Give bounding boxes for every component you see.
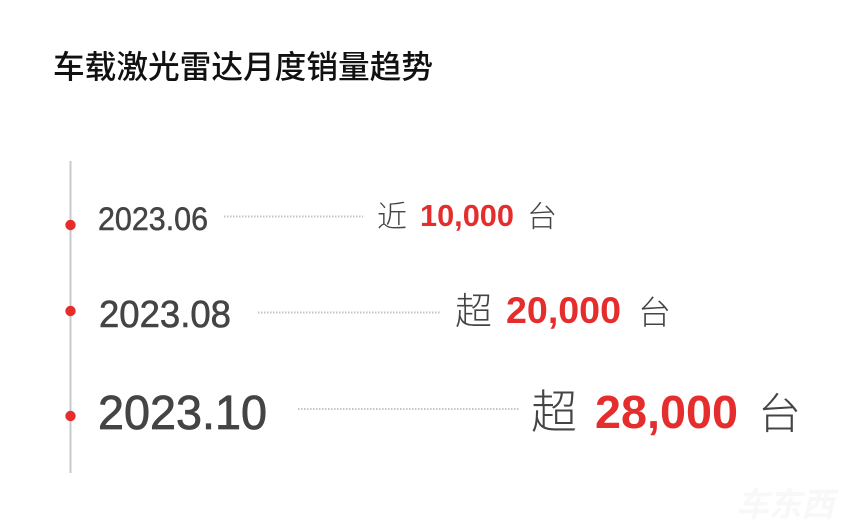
dotted connector: 2023.08 bbox=[258, 312, 440, 314]
value: near 10,000 units: 10,000 bbox=[420, 198, 514, 233]
dotted connector: 2023.06 bbox=[224, 216, 363, 218]
value: over 28,000 units: 28,000 bbox=[595, 386, 738, 438]
title: 车载激光雷达月度销量趋势 bbox=[53, 49, 433, 85]
row: 2023.10 bbox=[65, 386, 801, 440]
date: 2023.08: 2023.08 bbox=[99, 294, 231, 336]
dotted connector: 2023.10 bbox=[298, 408, 520, 410]
value: near 10,000 units bbox=[377, 198, 557, 234]
value: over 28,000 units: 台 bbox=[758, 391, 801, 439]
row: 2023.08 bbox=[65, 290, 671, 336]
value: near 10,000 units: 近 bbox=[377, 201, 407, 234]
value: over 20,000 units bbox=[455, 290, 671, 332]
timeline axis bbox=[70, 161, 72, 473]
value: over 28,000 units: 超 bbox=[531, 386, 577, 438]
value: over 20,000 units: 超 bbox=[455, 291, 492, 332]
value: over 28,000 units bbox=[531, 386, 801, 439]
row: 2023.06 bbox=[65, 198, 557, 237]
value: near 10,000 units: 台 bbox=[527, 201, 557, 234]
marker dot: 2023.10 bbox=[65, 411, 76, 421]
date: 2023.06: 2023.06 bbox=[98, 201, 208, 237]
date: 2023.10: 2023.10 bbox=[98, 386, 267, 440]
value: over 20,000 units: 20,000 bbox=[506, 290, 621, 331]
marker dot: 2023.08 bbox=[65, 306, 76, 316]
watermark: 车东西 bbox=[736, 486, 839, 523]
marker dot: 2023.06 bbox=[65, 220, 76, 230]
value: over 20,000 units: 台 bbox=[638, 294, 671, 331]
